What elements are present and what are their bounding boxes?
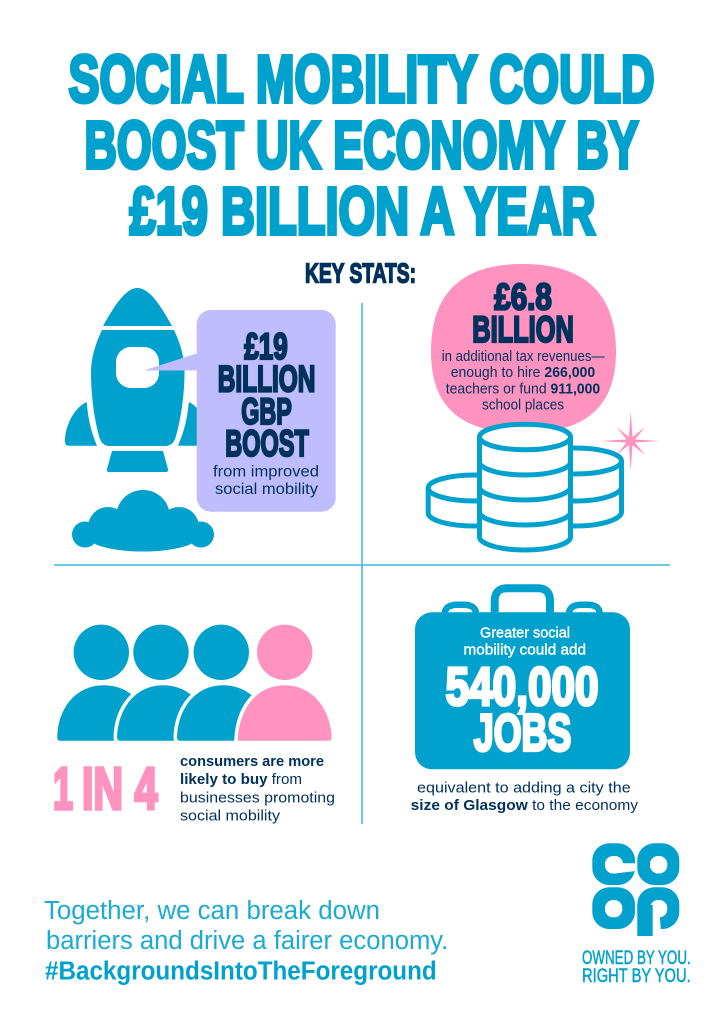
caption: size of Glasgow to the economy: [411, 797, 639, 814]
caption: school places: [482, 398, 564, 414]
big stat: 19 billion GBP boost: BILLION: [218, 359, 315, 400]
lead-in text: [464, 625, 586, 658]
big stat: 1 in 4: [53, 756, 158, 822]
caption: [411, 779, 639, 814]
logo tagline: [582, 948, 691, 987]
title: [68, 43, 654, 249]
big stat: 540,000 jobs: 540,000: [446, 658, 599, 717]
caption: likely to buy from: [180, 771, 302, 788]
icon: people: [57, 625, 332, 741]
caption: in additional tax revenues—: [442, 349, 605, 365]
big stat: 1 in 4: IN: [82, 756, 123, 822]
speech bubble: [144, 310, 336, 512]
logo tagline: RIGHT BY YOU.: [582, 966, 691, 987]
panel: rocket boost: [65, 288, 336, 552]
big stat: 1 in 4: 4: [134, 756, 158, 822]
closing message: barriers and drive a fairer economy.: [46, 927, 448, 955]
icon: rocket: [65, 288, 210, 472]
pink blob: [431, 264, 616, 433]
closing message: #BackgroundsIntoTheForeground: [45, 957, 437, 985]
closing message: Together, we can break down: [44, 897, 380, 925]
caption: social mobility: [215, 481, 318, 498]
caption: consumers are more: [180, 753, 324, 770]
caption: [180, 753, 335, 825]
icon: coin stacks: [428, 424, 622, 550]
big stat: 6.8 billion: [472, 276, 574, 350]
big stat: 19 billion GBP boost: GBP: [241, 391, 292, 432]
closing message: [44, 897, 448, 985]
big stat: 6.8 billion: £6.8: [494, 276, 552, 317]
big stat: 540,000 jobs: [446, 658, 599, 762]
caption: from improved: [213, 464, 319, 480]
caption: [442, 349, 605, 414]
big stat: 19 billion GBP boost: [218, 326, 315, 464]
caption: enough to hire 266,000: [451, 365, 595, 381]
caption: teachers or fund 911,000: [446, 382, 600, 398]
icon: briefcase: [415, 588, 630, 769]
big stat: 19 billion GBP boost: £19: [244, 326, 288, 367]
lead-in text: Greater social: [480, 625, 570, 642]
caption: businesses promoting: [180, 789, 335, 806]
big stat: 19 billion GBP boost: BOOST: [225, 423, 309, 464]
big stat: 1 in 4: 1: [53, 756, 73, 822]
big stat: 6.8 billion: BILLION: [472, 309, 574, 350]
panel: one in four: [53, 625, 335, 825]
big stat: 540,000 jobs: JOBS: [474, 704, 571, 762]
panel: jobs: [411, 588, 639, 814]
icon: sparkle: [600, 411, 660, 471]
panel: tax revenues: [428, 264, 660, 550]
caption: equivalent to adding a city the: [417, 779, 631, 796]
icon: cloud: [72, 490, 214, 552]
caption: [213, 464, 319, 498]
lead-in text: mobility could add: [464, 641, 586, 658]
logo: co-op: [592, 843, 679, 936]
key stats heading: KEY STATS:: [305, 258, 416, 288]
caption: social mobility: [180, 808, 281, 825]
